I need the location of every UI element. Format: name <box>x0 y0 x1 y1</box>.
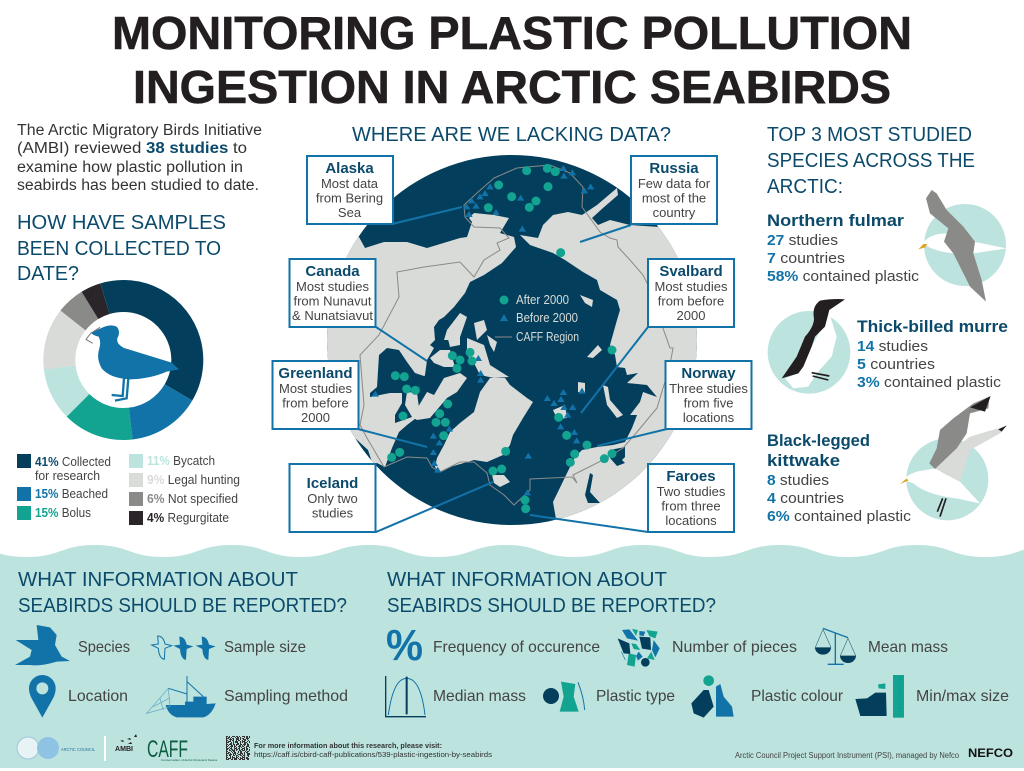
label: sampling method: Sampling method <box>224 688 348 705</box>
callout: Iceland <box>290 464 376 532</box>
illustration: Black-legged kittwake <box>900 396 1007 520</box>
heading: how samples were collected: BEEN COLLECTED TO <box>17 237 221 260</box>
callout: Norway: locations <box>683 410 735 425</box>
heading: how samples were collected <box>17 211 226 285</box>
callout: Russia: country <box>653 205 696 220</box>
QR code <box>226 736 250 760</box>
icon: species bird <box>15 625 70 665</box>
callout leader lines <box>358 207 667 532</box>
map legend: CAFF Region <box>516 330 579 344</box>
heading: plastic information: SEABIRDS SHOULD BE REPORTED? <box>387 594 716 617</box>
label: species: Species <box>78 639 130 656</box>
heading: plastic information: WHAT INFORMATION ABOUT <box>387 568 667 591</box>
footer: funding credit: Arctic Council Project Support Instrument (PSI), managed by Nefco <box>735 751 960 760</box>
callout: Faroes: Two studies <box>657 484 726 499</box>
callout: Iceland: Iceland <box>307 475 358 492</box>
illustration: Thick-billed murre <box>768 299 850 394</box>
icon: percent: % <box>386 621 423 670</box>
callout: Faroes <box>648 464 734 532</box>
callout: Norway: Three studies <box>669 381 748 396</box>
logo: Arctic Council <box>17 737 95 759</box>
label: min max size: Min/max size <box>916 688 1009 705</box>
donut legend: 15% Bolus <box>35 506 91 520</box>
logo: AMBI <box>115 734 137 753</box>
callout: Iceland: Only two <box>307 491 358 506</box>
donut legend: 11% Bycatch <box>147 454 215 468</box>
heading: where are we lacking data: WHERE ARE WE LACKING DATA? <box>352 123 671 146</box>
callout: Faroes: from three <box>661 498 721 514</box>
icon: sample size birds <box>152 636 216 660</box>
donut chart: sample collection <box>33 269 214 451</box>
bottom band <box>0 545 1024 768</box>
callout: Canada: Canada <box>305 263 360 280</box>
footer: more information: https://caff.is/cbird-caff-publications/539-plastic-ingestion-by-seabirds <box>254 750 492 759</box>
icon: plastic colours <box>691 675 734 718</box>
map markers: before 2000 <box>372 165 594 495</box>
callout: Alaska <box>307 156 393 224</box>
callout: Faroes: locations <box>665 513 717 528</box>
species: Northern fulmar: Northern fulmar <box>767 211 904 230</box>
callout: Alaska: Most data <box>321 176 379 191</box>
intro text: The Arctic Migratory Birds Initiative <box>17 122 262 139</box>
icon: plastic types <box>543 682 585 712</box>
logo: Arctic Council: ARCTIC COUNCIL <box>61 747 95 752</box>
map legend <box>495 293 579 344</box>
icon: balance scale <box>815 628 856 664</box>
logo: CAFF: Conservation of Arctic Flora and Fauna <box>161 758 217 762</box>
icon: plastic pieces <box>618 629 660 667</box>
callout: Norway: from five <box>684 396 733 410</box>
species: Black-legged kittwake: 8 studies <box>767 472 829 489</box>
title: INGESTION IN ARCTIC SEABIRDS <box>133 61 891 113</box>
heading: top 3 species <box>767 123 975 198</box>
species: Northern fulmar: 58% contained plastic <box>767 268 920 285</box>
species: Black-legged kittwake: Black-legged <box>767 431 870 450</box>
callout: Greenland: 2000 <box>301 410 330 425</box>
icon: median mass curve <box>386 676 426 717</box>
species: Thick-billed murre <box>857 317 1008 391</box>
label: number of pieces: Number of pieces <box>672 639 797 656</box>
title: MONITORING PLASTIC POLLUTION <box>112 7 912 59</box>
callout: Russia: Russia <box>649 160 699 177</box>
icon: gull with plastic <box>86 325 179 401</box>
icon: fishing boat <box>147 676 216 717</box>
donut legend: for research <box>35 469 100 483</box>
callout: Russia <box>631 156 717 224</box>
callout: Faroes: Faroes <box>666 468 716 485</box>
species: Northern fulmar: 27 studies <box>767 232 838 249</box>
species: Northern fulmar: 7 countries <box>767 250 845 267</box>
callout: Iceland: studies <box>312 506 354 520</box>
label: plastic colour: Plastic colour <box>751 688 844 705</box>
callout: Greenland: Most studies <box>279 381 352 396</box>
callout: Svalbard <box>648 259 734 327</box>
donut legend: 9% Legal hunting <box>147 473 240 487</box>
donut legend: 4% Regurgitate <box>147 511 229 525</box>
callout: Svalbard: from before <box>658 294 724 308</box>
callout: Canada: & Nunatsiavut <box>292 308 373 323</box>
species: Black-legged kittwake <box>767 431 912 525</box>
intro text: examine how plastic pollution in <box>17 159 243 176</box>
illustration: Northern fulmar <box>918 190 1007 302</box>
donut legend: 6% Not specified <box>147 492 238 506</box>
callout: Russia: most of the <box>642 190 706 206</box>
species: Thick-billed murre: 5 countries <box>857 356 935 373</box>
donut legend <box>17 454 240 525</box>
callout: Greenland: from before <box>282 396 349 410</box>
callout: Alaska: Sea <box>338 205 362 220</box>
species: Thick-billed murre: 3% contained plastic <box>857 374 1002 391</box>
callout: Norway <box>666 361 752 429</box>
label: frequency: Frequency of occurence <box>433 639 600 656</box>
species: Thick-billed murre: Thick-billed murre <box>857 317 1008 336</box>
icon: min max size <box>855 675 904 718</box>
donut legend: 41% Collected <box>35 455 111 469</box>
heading: top 3 species: ARCTIC: <box>767 175 843 198</box>
callout: Russia: Few data for <box>638 176 711 191</box>
footer: more information <box>254 741 492 759</box>
heading: top 3 species: TOP 3 MOST STUDIED <box>767 123 972 146</box>
species: Black-legged kittwake: 4 countries <box>767 490 844 507</box>
intro text: (AMBI) reviewed 38 studies to <box>17 140 247 157</box>
callout: Norway: Norway <box>681 365 736 382</box>
species: Thick-billed murre: 14 studies <box>857 338 928 355</box>
map legend: Before 2000 <box>516 311 578 325</box>
callout: Canada: Most studies <box>296 279 369 294</box>
intro text: seabirds has been studied to date. <box>17 177 259 194</box>
callout: Canada <box>290 259 376 327</box>
heading: seabird information: WHAT INFORMATION ABOUT <box>18 568 298 591</box>
logo: AMBI: AMBI <box>115 746 133 753</box>
heading: how samples were collected: DATE? <box>17 262 79 285</box>
map: Arctic polar projection <box>327 155 697 525</box>
species: Black-legged kittwake: 6% contained plastic <box>767 508 912 525</box>
species: Black-legged kittwake: kittwake <box>767 451 840 470</box>
heading: how samples were collected: HOW HAVE SAMPLES <box>17 211 226 234</box>
callout: Greenland <box>272 361 358 429</box>
title <box>112 7 912 113</box>
callout: Svalbard: Most studies <box>655 279 728 294</box>
species: Northern fulmar <box>767 211 920 285</box>
callout: Svalbard: Svalbard <box>659 263 723 280</box>
donut legend: 15% Beached <box>35 487 108 501</box>
callout: Alaska: from Bering <box>316 190 383 206</box>
label: location: Location <box>68 688 128 705</box>
heading: seabird information: SEABIRDS SHOULD BE REPORTED? <box>18 594 347 617</box>
map legend: After 2000 <box>516 293 569 307</box>
map markers: after 2000 <box>387 164 616 513</box>
logo: CAFF: CAFF <box>147 736 188 763</box>
heading: top 3 species: SPECIES ACROSS THE <box>767 149 975 172</box>
icon: location pin <box>29 675 56 718</box>
callout: Svalbard: 2000 <box>677 308 705 323</box>
label: mean mass: Mean mass <box>868 639 948 656</box>
label: median mass: Median mass <box>433 688 526 705</box>
intro text <box>17 122 262 194</box>
logo: NEFCO: NEFCO <box>968 748 1013 760</box>
label: sample size: Sample size <box>224 639 306 656</box>
heading: seabird information <box>18 568 347 617</box>
callout: Canada: from Nunavut <box>293 294 372 308</box>
footer: more information: For more information about this research, please visit: <box>254 741 442 750</box>
callout: Alaska: Alaska <box>325 160 374 177</box>
heading: plastic information <box>387 568 716 617</box>
callout: Greenland: Greenland <box>278 365 353 382</box>
label: plastic type: Plastic type <box>596 688 675 705</box>
